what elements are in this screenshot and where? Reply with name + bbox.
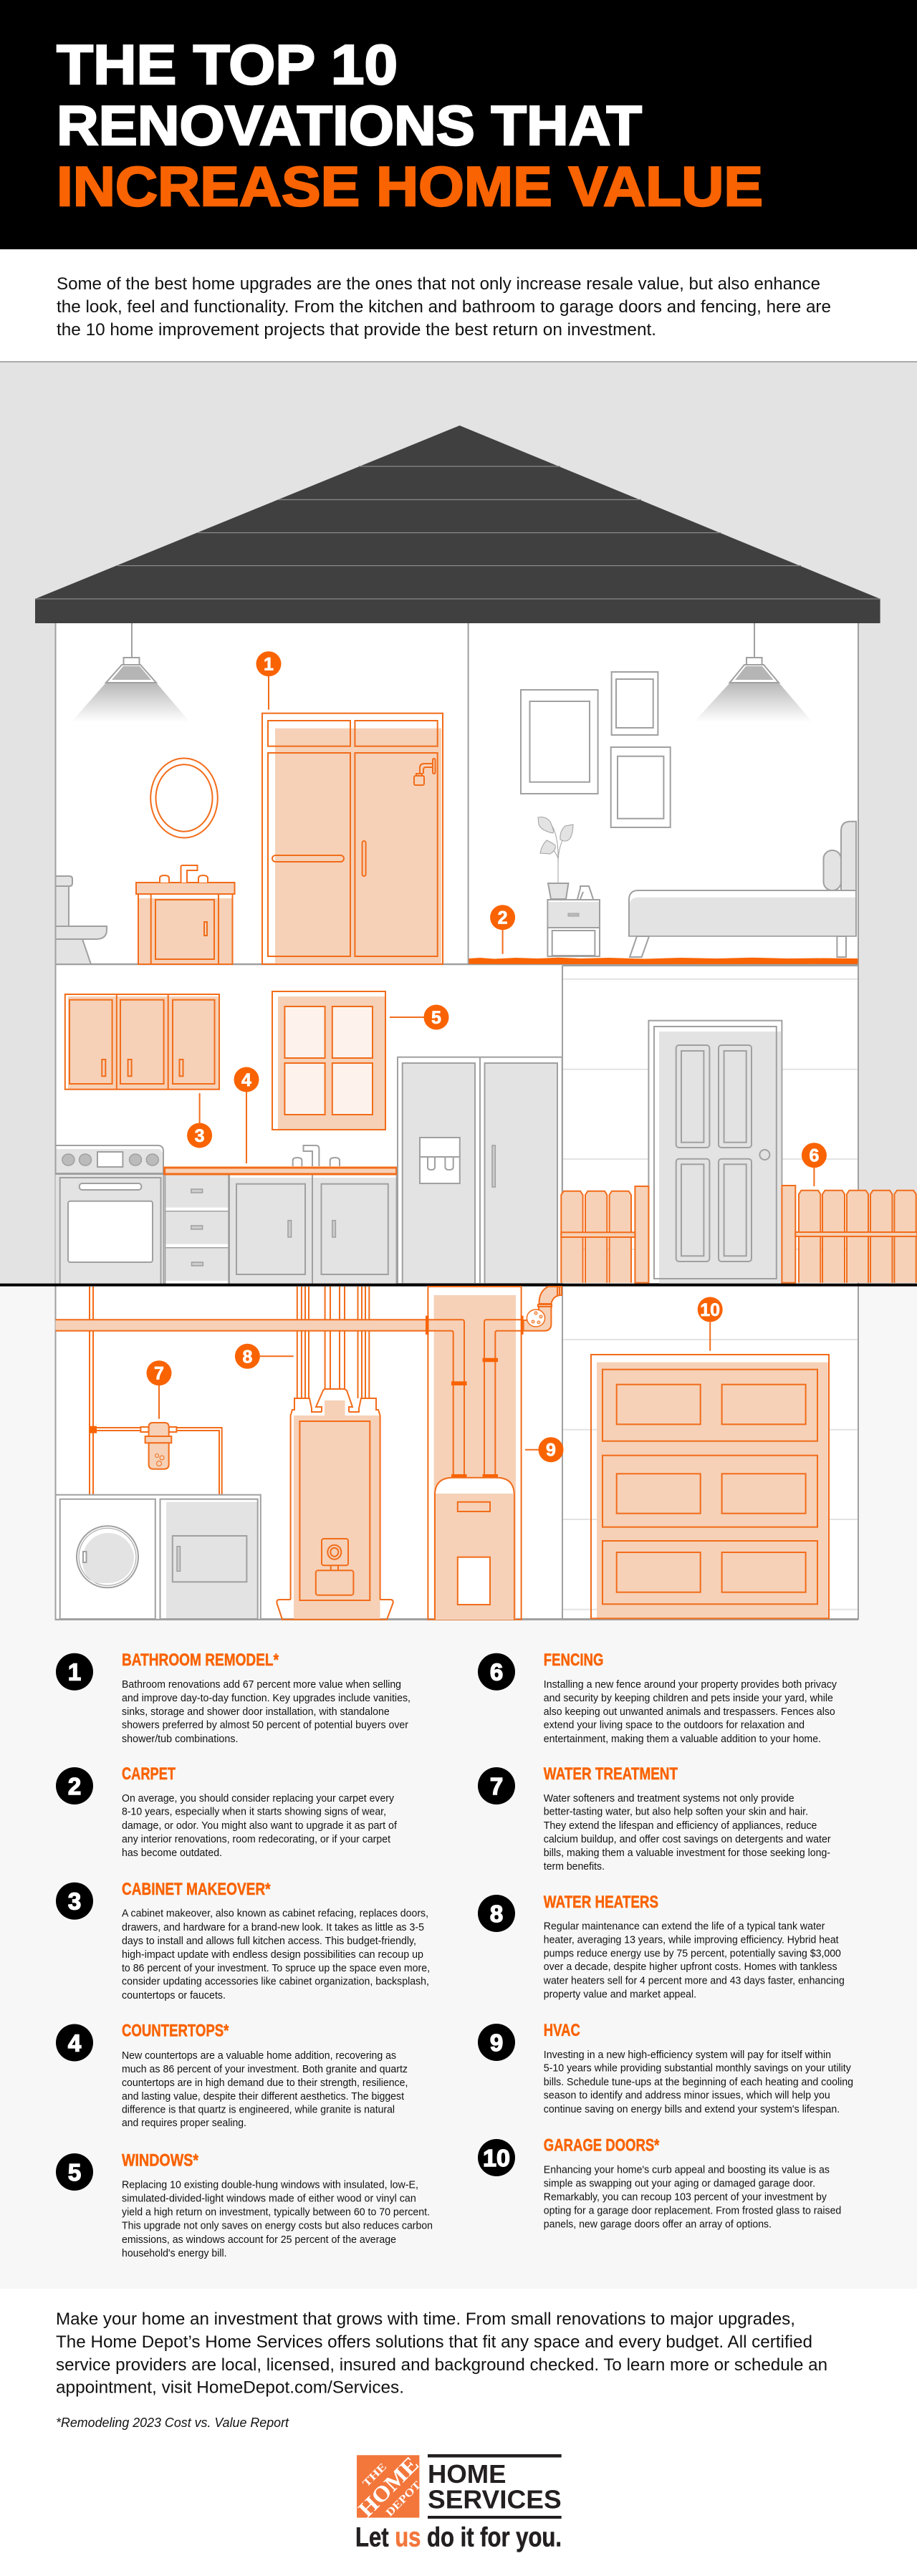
pin 9: 9 — [546, 1441, 556, 1461]
item 6: fencing: also keeping out unwanted animals and trespassers. Fences also — [544, 1706, 835, 1718]
pin 4 — [234, 1067, 259, 1163]
room walls — [55, 623, 858, 1620]
item 6: fencing: FENCING — [544, 1650, 603, 1670]
closing text: appointment, visit HomeDepot.com/Services. — [56, 2378, 404, 2397]
header banner with title: THE TOP 10 — [57, 33, 398, 96]
item 3: cabinet makeover: high-impact update with endless design possibilities can recoup up — [122, 1949, 423, 1961]
item 3: cabinet makeover: countertops or faucets. — [122, 1990, 226, 2001]
pin 6 — [802, 1143, 827, 1186]
item 8: water heaters: over a decade, despite higher upfront costs. Homes with tankless — [544, 1961, 837, 1973]
item 8: water heaters: heater, averaging 13 years, while improving efficiency. Hybrid heat — [544, 1935, 839, 1946]
item 4: countertops: much as 86 percent of your investment. Both granite and quartz — [122, 2064, 408, 2075]
item 7: water treatment — [478, 1764, 831, 1873]
item 8: water heaters — [478, 1893, 845, 2001]
item 4: countertops: COUNTERTOPS* — [122, 2022, 229, 2041]
pin 9 — [525, 1437, 563, 1462]
item 7: water treatment: They extend the lifespan and efficiency of appliances, reduce — [544, 1820, 817, 1832]
item 9: HVAC: continue saving on energy bills and extend your system's lifespan. — [544, 2104, 840, 2115]
item 5: windows: This upgrade not only saves on energy costs but also reduces carbon — [122, 2221, 433, 2232]
item 5: windows: Replacing 10 existing double-hung windows with insulated, low-E, — [122, 2179, 418, 2191]
pin 5: 5 — [431, 1008, 441, 1028]
item 5: windows: emissions, as windows account for 25 percent of the average — [122, 2234, 396, 2246]
item 2: carpet: 8-10 years, especially when it starts showing signs of wear, — [122, 1807, 386, 1818]
item 7: water treatment: Water softeners and treatment systems not only provide — [544, 1793, 794, 1804]
floor divider — [0, 1284, 917, 1287]
pin 8: 8 — [242, 1347, 252, 1367]
pin 3 — [187, 1093, 212, 1148]
item 4: countertops: difference is that quartz is engineered, while granite is natural — [122, 2105, 395, 2116]
item 10: garage doors — [478, 2136, 841, 2231]
item 7: water treatment: term benefits. — [544, 1861, 605, 1873]
icon: right pendant lamp — [693, 623, 812, 722]
pin 2: 2 — [498, 908, 508, 928]
item 2: carpet: 2 — [68, 1773, 81, 1799]
item 7: water treatment: bills, making them a valuable investment for those seeking long- — [544, 1847, 830, 1859]
item 1: bathroom remodel: sinks, storage and shower door installation, with standalone — [122, 1706, 390, 1718]
exterior door — [648, 1021, 782, 1284]
item 4: countertops: New countertops are a valuable home addition, recovering as — [122, 2050, 396, 2062]
pin 2 — [490, 905, 515, 954]
item 2: carpet: CARPET — [122, 1764, 176, 1784]
item 6: fencing — [478, 1650, 837, 1745]
item 5: windows: household's energy bill. — [122, 2248, 226, 2259]
item 10: garage doors: GARAGE DOORS* — [544, 2136, 660, 2156]
item 7: water treatment: WATER TREATMENT — [544, 1764, 678, 1784]
logo: orange square: THE — [361, 2461, 389, 2489]
carpet — [469, 958, 858, 964]
icon: left pendant lamp — [72, 623, 190, 722]
item 4: countertops: and lasting value, despite their different aesthetics. The biggest — [122, 2091, 404, 2102]
logo: The Home Depot Home Services: Let us do it for you. — [355, 2522, 562, 2552]
house backdrop — [0, 361, 917, 2289]
item 6: fencing: and security by keeping children and pets inside your yard, while — [544, 1693, 833, 1704]
pin 8 — [235, 1344, 294, 1369]
callout 1 with shower — [262, 713, 443, 964]
item 6: fencing: 6 — [490, 1659, 503, 1685]
kitchen: drawers and lower cabinets — [165, 1175, 397, 1284]
item 8: water heaters: water heaters sell for 4 percent more and 43 days faster, enhancing — [543, 1975, 845, 1986]
item 10: garage doors: Enhancing your home's curb appeal and boosting its value is as — [544, 2164, 830, 2176]
item 10: garage doors: panels, new garage doors offer an array of options. — [544, 2219, 772, 2231]
roof — [35, 426, 880, 623]
item 1: bathroom remodel: Bathroom renovations add 67 percent more value when selling — [122, 1679, 401, 1691]
item 1: bathroom remodel — [56, 1650, 411, 1745]
item 5: windows: yield a high return on investment, typically between 60 to 70 percent. — [122, 2207, 430, 2219]
bathroom: vanity with sink — [136, 865, 235, 964]
item 6: fencing: Installing a new fence around your property provides both privacy — [544, 1679, 837, 1691]
item 5: windows: 5 — [68, 2159, 81, 2186]
item 1: bathroom remodel: 1 — [68, 1659, 81, 1685]
item 6: fencing: extend your living space to the outdoors for relaxation and — [544, 1720, 805, 1731]
item 9: HVAC: 5-10 years while providing substantial monthly savings on your utility — [544, 2063, 851, 2075]
item 2: carpet: any interior renovations, room redecorating, or if your carpet — [122, 1834, 390, 1845]
intro text: Some of the best home upgrades are the ones that not only increase resale value, but also enhance — [57, 274, 820, 294]
washer and dryer — [56, 1495, 261, 1620]
logo: The Home Depot Home Services — [345, 2444, 562, 2552]
header banner with title — [0, 0, 917, 249]
fence, left section — [561, 1186, 648, 1283]
pin 3: 3 — [195, 1126, 205, 1146]
logo: orange square: DEPOT — [384, 2479, 423, 2519]
bedroom: bed — [629, 822, 856, 957]
item 5: windows: WINDOWS* — [122, 2151, 199, 2171]
item 1: bathroom remodel: showers preferred by almost 50 percent of potential buyers over — [122, 1720, 408, 1731]
item 2: carpet — [56, 1764, 398, 1859]
closing text: Make your home an investment that grows with time. From small renovations to major upgrades, — [56, 2310, 795, 2329]
pin 6: 6 — [809, 1146, 819, 1166]
item 9: HVAC: 9 — [490, 2029, 503, 2056]
item 1: bathroom remodel: and improve day-to-day function. Key upgrades include vanities, — [122, 1693, 411, 1704]
kitchen: wall cabinets — [65, 994, 219, 1090]
item 8: water heaters: pumps reduce energy use by 75 percent, potentially saving $3,000 — [544, 1948, 841, 1959]
item 3: cabinet makeover: drawers, and hardware for a brand-new look. It takes as little as 3-5 — [122, 1922, 424, 1933]
kitchen: refrigerator — [398, 1057, 562, 1284]
item 10: garage doors: opting for a garage door replacement. From frosted glass to raised — [544, 2206, 841, 2217]
item 9: HVAC: HVAC — [544, 2021, 580, 2040]
pin 7 — [146, 1360, 172, 1419]
pin 10 — [698, 1297, 723, 1351]
header banner with title: RENOVATIONS THAT — [57, 94, 642, 157]
HVAC exhaust fan and elbow — [524, 1287, 562, 1331]
kitchen: stove — [56, 1145, 163, 1284]
garage door — [591, 1355, 829, 1618]
bathroom: round mirror — [150, 758, 218, 838]
item 8: water heaters: WATER HEATERS — [544, 1893, 658, 1912]
item 3: cabinet makeover — [56, 1880, 430, 2001]
closing text: service providers are local, licensed, insured and background checked. To learn more or schedule an — [56, 2355, 827, 2375]
item 3: cabinet makeover: consider updating accessories like cabinet organization, backsplash, — [122, 1976, 429, 1988]
fence, right section — [782, 1186, 917, 1283]
item 1: bathroom remodel: shower/tub combinations. — [122, 1734, 238, 1745]
item 7: water treatment: 7 — [490, 1773, 503, 1799]
item 10: garage doors: 10 — [483, 2145, 510, 2171]
item 3: cabinet makeover: 3 — [68, 1888, 81, 1914]
item 2: carpet: damage, or odor. You might also want to upgrade it as part of — [122, 1820, 398, 1832]
item 4: countertops — [56, 2022, 408, 2129]
water heater — [277, 1389, 393, 1620]
item 8: water heaters: Regular maintenance can extend the life of a typical tank water — [544, 1921, 825, 1933]
HVAC system — [426, 1287, 524, 1620]
kitchen: window — [272, 991, 385, 1130]
pin 4: 4 — [241, 1070, 251, 1090]
intro text: the 10 home improvement projects that provide the best return on investment. — [57, 320, 656, 340]
kitchen: countertop — [165, 1168, 397, 1174]
bathroom: toilet — [56, 876, 107, 964]
basement: cold water pipe — [89, 1287, 222, 1495]
item 2: carpet: has become outdated. — [122, 1847, 222, 1859]
logo: The Home Depot Home Services: HOME — [428, 2459, 506, 2489]
item 8: water heaters: 8 — [490, 1900, 503, 1927]
item 8: water heaters: property value and market appeal. — [544, 1989, 696, 2001]
item 10: garage doors: simple as swapping out your aging or damaged garage door. — [544, 2178, 815, 2189]
closing text: The Home Depot’s Home Services offers solutions that fit any space and every budget. All certified — [56, 2332, 812, 2352]
pin 1: 1 — [264, 655, 274, 675]
item 4: countertops: countertops are in high demand due to their strength, resilience, — [122, 2077, 408, 2089]
water treatment filter — [140, 1423, 176, 1469]
bedroom: picture frames — [521, 672, 671, 827]
pin 7: 7 — [154, 1364, 164, 1384]
item 3: cabinet makeover: to 86 percent of your investment. To spruce up the space even more, — [122, 1963, 430, 1974]
item 5: windows — [56, 2151, 433, 2259]
logo: The Home Depot Home Services: SERVICES — [428, 2485, 562, 2514]
footnote: *Remodeling 2023 Cost vs. Value Report — [56, 2416, 289, 2430]
item 3: cabinet makeover: A cabinet makeover, also known as cabinet refacing, replaces doors, — [122, 1908, 428, 1920]
intro text: the look, feel and functionality. From the kitchen and bathroom to garage doors and fencing, here are — [57, 297, 831, 317]
item 9: HVAC: bills. Schedule tune-ups at the beginning of each heating and cooling — [544, 2077, 853, 2088]
closing text — [56, 2310, 827, 2397]
item 9: HVAC: Investing in a new high-efficiency system will pay for itself within — [544, 2049, 831, 2061]
pin 1 — [256, 651, 281, 710]
item 3: cabinet makeover: days to install and allows full kitchen access. This budget-friendly, — [122, 1936, 416, 1947]
item 4: countertops: 4 — [68, 2030, 82, 2056]
item 3: cabinet makeover: CABINET MAKEOVER* — [122, 1880, 271, 1899]
item 6: fencing: entertainment, making them a valuable addition to your home. — [544, 1734, 821, 1745]
item 2: carpet: On average, you should consider replacing your carpet every — [122, 1793, 395, 1804]
item 10: garage doors: Remarkably, you can recoup 103 percent of your investment by — [544, 2192, 827, 2203]
item 5: windows: simulated-divided-light windows made of either wood or vinyl can — [122, 2193, 416, 2205]
item 9: HVAC: season to identify and address minor issues, which will help you — [544, 2090, 830, 2102]
item 7: water treatment: calcium buildup, and offer cost savings on detergents and water — [544, 1834, 831, 1845]
item 9: HVAC — [478, 2021, 853, 2115]
item 7: water treatment: better-tasting water, but also help soften your skin and hair. — [544, 1807, 808, 1818]
item 4: countertops: and requires proper sealing. — [122, 2118, 246, 2129]
item 1: bathroom remodel: BATHROOM REMODEL* — [122, 1650, 279, 1670]
logo: orange square — [345, 2444, 433, 2531]
kitchen: sink faucet — [293, 1145, 340, 1166]
pin 10: 10 — [700, 1300, 720, 1320]
pin 5 — [390, 1004, 448, 1030]
intro text — [57, 274, 831, 340]
bedroom: plant and nightstand — [538, 817, 600, 956]
logo: orange square: HOME — [353, 2451, 423, 2522]
basement: duct horizontal — [56, 1320, 426, 1331]
basement: water heater vent pipes — [297, 1287, 369, 1398]
header banner with title: INCREASE HOME VALUE — [57, 155, 763, 218]
